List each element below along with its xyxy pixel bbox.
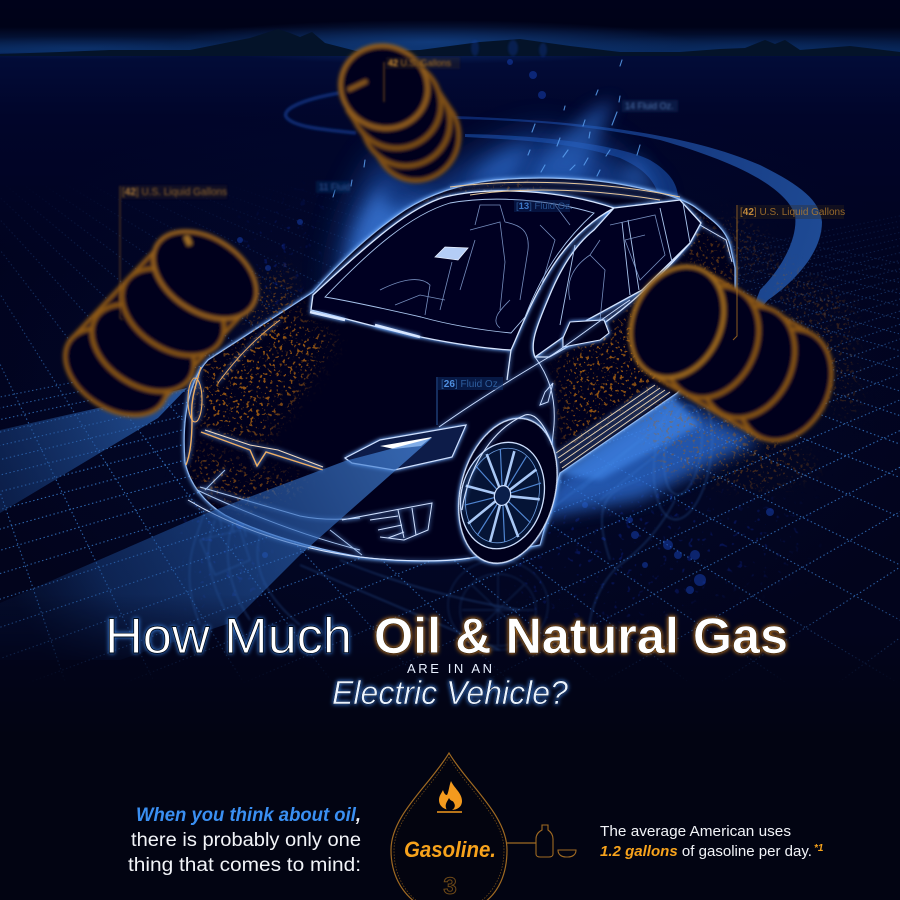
gasoline usage text: *1 (814, 843, 824, 854)
sparks (333, 60, 640, 197)
number 3: 3 (443, 873, 457, 900)
label: 13 fluid oz: [13] Fluid Oz. (516, 201, 573, 212)
car reflection (190, 387, 720, 650)
orange particles on car (184, 178, 735, 513)
icon: flame (437, 781, 462, 812)
label: 14 fluid oz: 14 Fluid Oz. (625, 101, 674, 111)
barrel: right (613, 251, 849, 456)
mountain horizon (0, 29, 900, 56)
label: left barrel 42 U.S. liquid gallons: [42] U.S. Liquid Gallons (122, 187, 227, 198)
electric car (180, 170, 750, 574)
orange hood lines and grille logo (186, 320, 323, 470)
orange particles around barrels (242, 212, 864, 496)
label: 26 fluid oz: [26] Fluid Oz. (441, 379, 500, 390)
label: top barrel gallons: 42 U.S. Gallons (388, 58, 452, 68)
wipers (310, 312, 420, 337)
perspective grid floor (0, 198, 900, 678)
floor glow (0, 80, 900, 680)
barrel: top (329, 33, 472, 193)
windows and pillars (311, 182, 701, 380)
gasoline usage text: 1.2 gallons of gasoline per day. (600, 844, 812, 860)
interior seats (380, 205, 665, 328)
headlight beam (0, 438, 432, 660)
oil drop gasoline badge (391, 753, 507, 900)
label: 26 fluid oz (437, 377, 503, 425)
upper light beam (0, 388, 187, 513)
title line: How Much Oil & Natural Gas: How Much (105, 608, 352, 664)
light glow under car (525, 396, 760, 520)
intro text (128, 805, 361, 876)
body lines (188, 225, 732, 561)
title line: How Much Oil & Natural Gas (105, 608, 788, 664)
wheel arch (462, 415, 552, 510)
gasoline label: Gasoline. (404, 837, 496, 862)
intro text: thing that comes to mind: (128, 855, 361, 876)
icon: gallon bottle (536, 825, 553, 857)
orbit ring bands (286, 93, 822, 322)
horizon glow (0, 20, 900, 64)
blue floor particles (182, 199, 812, 624)
barrel: left (49, 213, 273, 434)
intro text: there is probably only one (131, 830, 361, 851)
title line: Electric Vehicle?: Electric Vehicle? (332, 674, 569, 711)
intro text: When you think about oil, (136, 805, 361, 826)
blue smoke behind the car (335, 100, 660, 300)
gasoline usage text: The average American uses (600, 824, 791, 840)
label: top barrel gallons (384, 57, 460, 102)
gasoline usage text (600, 824, 824, 860)
centre screen (435, 247, 468, 260)
label: right barrel 42 U.S. liquid gallons (733, 205, 845, 340)
front wheel (443, 407, 572, 574)
fog light (342, 503, 432, 540)
car body (184, 178, 735, 561)
blue particles (236, 40, 774, 594)
headlight (345, 425, 466, 470)
label: 11 fluid oz: 11 Fluid (319, 182, 350, 192)
title line: How Much Oil & Natural Gas: Oil & Natural Gas (374, 608, 788, 664)
label: left barrel 42 U.S. liquid gallons (120, 185, 227, 320)
connector line (507, 842, 536, 844)
side mirror (563, 320, 609, 347)
label: right barrel 42 U.S. liquid gallons: [42] U.S. Liquid Gallons (740, 207, 845, 218)
title (105, 608, 788, 711)
title line: are in an: ARE IN AN (407, 661, 492, 676)
icon: small bowl (558, 850, 576, 857)
